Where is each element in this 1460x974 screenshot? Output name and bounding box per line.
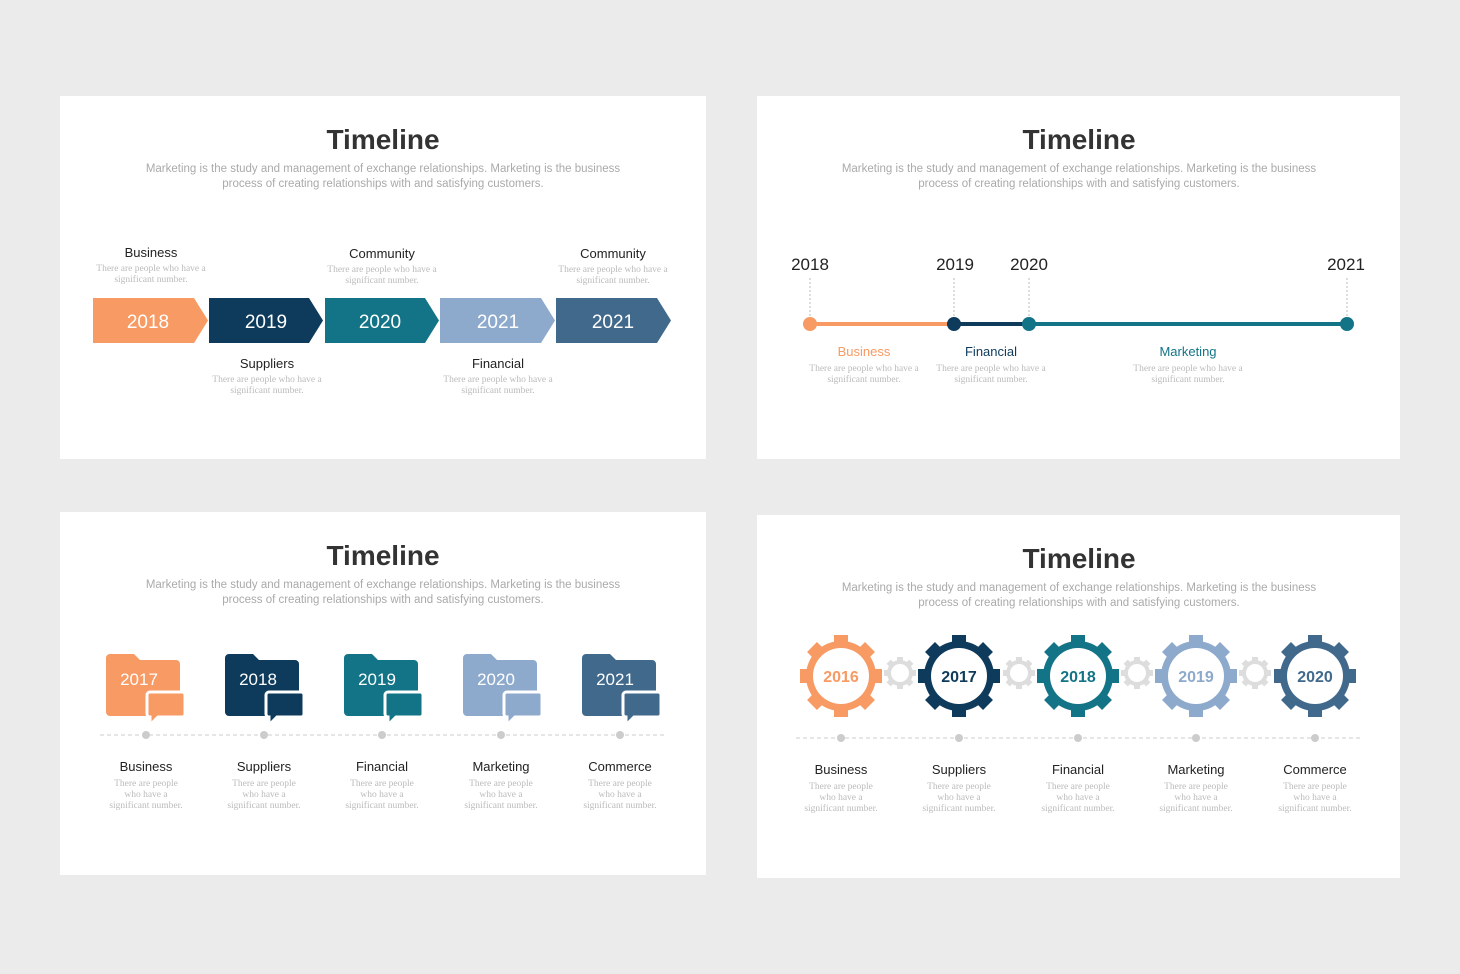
gear icons: 2017: [941, 669, 977, 686]
labels: significant number.: [227, 800, 301, 811]
title: Timeline: [1022, 124, 1136, 155]
labels: There are people who have a: [327, 265, 438, 275]
labels: There are people: [1046, 782, 1110, 792]
chevron arrows: 2018: [127, 312, 169, 333]
labels: who have a: [819, 793, 863, 803]
labels: who have a: [479, 790, 523, 800]
labels: There are people: [232, 779, 296, 789]
labels: who have a: [242, 790, 286, 800]
folder icons: 2019: [358, 670, 396, 689]
folder icons: 2020: [477, 670, 515, 689]
chevron arrows: [93, 298, 671, 343]
labels: Community: [349, 246, 415, 261]
labels: significant number.: [461, 385, 535, 396]
labels: significant number.: [1278, 803, 1352, 814]
labels: Financial: [965, 344, 1017, 359]
labels: significant number.: [345, 800, 419, 811]
labels: significant number.: [230, 385, 304, 396]
labels: who have a: [124, 790, 168, 800]
labels: [809, 344, 1244, 385]
labels: Commerce: [1283, 762, 1347, 777]
gear icons: 2020: [1297, 669, 1333, 686]
labels: Community: [580, 246, 646, 261]
subtitle: process of creating relationships with and satisfying customers.: [918, 597, 1240, 609]
gear icons: 2019: [1178, 669, 1214, 686]
panel: folder timeline: [60, 512, 706, 875]
labels: Financial: [356, 759, 408, 774]
labels: There are people: [114, 779, 178, 789]
line chart: 2020: [1010, 255, 1048, 274]
labels: Marketing: [1167, 762, 1225, 777]
subtitle: [842, 582, 1316, 609]
labels: who have a: [1174, 793, 1218, 803]
panel: gear timeline: [757, 515, 1400, 878]
title: Timeline: [326, 124, 440, 155]
labels: There are people who have a: [212, 375, 323, 385]
line chart: 2018: [791, 255, 829, 274]
labels: Business: [838, 344, 891, 359]
gear icons: 2018: [1060, 669, 1096, 686]
dashed line: [100, 731, 666, 739]
labels: There are people: [809, 782, 873, 792]
labels: Financial: [472, 356, 524, 371]
gear icons: [800, 635, 1356, 717]
labels: significant number.: [583, 800, 657, 811]
labels: who have a: [598, 790, 642, 800]
folder icons: 2017: [120, 670, 158, 689]
labels: who have a: [1056, 793, 1100, 803]
labels: There are people: [927, 782, 991, 792]
line chart: 2021: [1327, 255, 1365, 274]
labels: Marketing: [1159, 344, 1217, 359]
subtitle: Marketing is the study and management of exchange relationships. Marketing is the business: [842, 163, 1316, 175]
labels: Suppliers: [240, 356, 295, 371]
subtitle: process of creating relationships with and satisfying customers.: [222, 594, 544, 606]
labels: significant number.: [954, 374, 1028, 385]
labels: There are people who have a: [558, 265, 669, 275]
title: Timeline: [1022, 543, 1136, 574]
subtitle: [842, 163, 1316, 190]
panel: line timeline: [757, 96, 1400, 459]
gear icons: 2016: [823, 669, 859, 686]
labels: significant number.: [464, 800, 538, 811]
labels: significant number.: [1041, 803, 1115, 814]
panel: arrow timeline: [60, 96, 706, 459]
folder icons: 2018: [239, 670, 277, 689]
labels: significant number.: [345, 275, 419, 286]
labels: Suppliers: [237, 759, 292, 774]
labels: significant number.: [576, 275, 650, 286]
labels: [804, 762, 1352, 814]
labels: significant number.: [114, 274, 188, 285]
folder icons: [106, 654, 661, 725]
labels: Business: [815, 762, 868, 777]
labels: who have a: [1293, 793, 1337, 803]
labels: Business: [120, 759, 173, 774]
subtitle: Marketing is the study and management of exchange relationships. Marketing is the business: [146, 163, 620, 175]
labels: Commerce: [588, 759, 652, 774]
labels: Business: [125, 245, 178, 260]
chevron arrows: 2021: [477, 312, 519, 333]
labels: [96, 245, 669, 396]
subtitle: [146, 163, 620, 190]
labels: who have a: [360, 790, 404, 800]
labels: significant number.: [827, 374, 901, 385]
labels: There are people who have a: [96, 264, 207, 274]
labels: There are people who have a: [936, 364, 1047, 374]
labels: Suppliers: [932, 762, 987, 777]
labels: There are people: [1164, 782, 1228, 792]
labels: Marketing: [472, 759, 530, 774]
subtitle: process of creating relationships with and satisfying customers.: [918, 178, 1240, 190]
title: Timeline: [326, 540, 440, 571]
labels: There are people who have a: [809, 364, 920, 374]
labels: significant number.: [109, 800, 183, 811]
chevron arrows: 2019: [245, 312, 287, 333]
subtitle: process of creating relationships with and satisfying customers.: [222, 178, 544, 190]
labels: There are people: [350, 779, 414, 789]
subtitle: Marketing is the study and management of exchange relationships. Marketing is the business: [146, 579, 620, 591]
labels: [109, 759, 657, 811]
labels: significant number.: [804, 803, 878, 814]
folder icons: 2021: [596, 670, 634, 689]
labels: who have a: [937, 793, 981, 803]
labels: There are people who have a: [443, 375, 554, 385]
line chart: 2019: [936, 255, 974, 274]
line chart: [791, 255, 1365, 331]
labels: significant number.: [1159, 803, 1233, 814]
labels: significant number.: [922, 803, 996, 814]
labels: There are people: [469, 779, 533, 789]
dashed line: [796, 734, 1362, 742]
labels: significant number.: [1151, 374, 1225, 385]
chevron arrows: 2020: [359, 312, 401, 333]
labels: There are people: [1283, 782, 1347, 792]
subtitle: [146, 579, 620, 606]
labels: There are people who have a: [1133, 364, 1244, 374]
chevron arrows: 2021: [592, 312, 634, 333]
subtitle: Marketing is the study and management of exchange relationships. Marketing is the business: [842, 582, 1316, 594]
labels: There are people: [588, 779, 652, 789]
labels: Financial: [1052, 762, 1104, 777]
